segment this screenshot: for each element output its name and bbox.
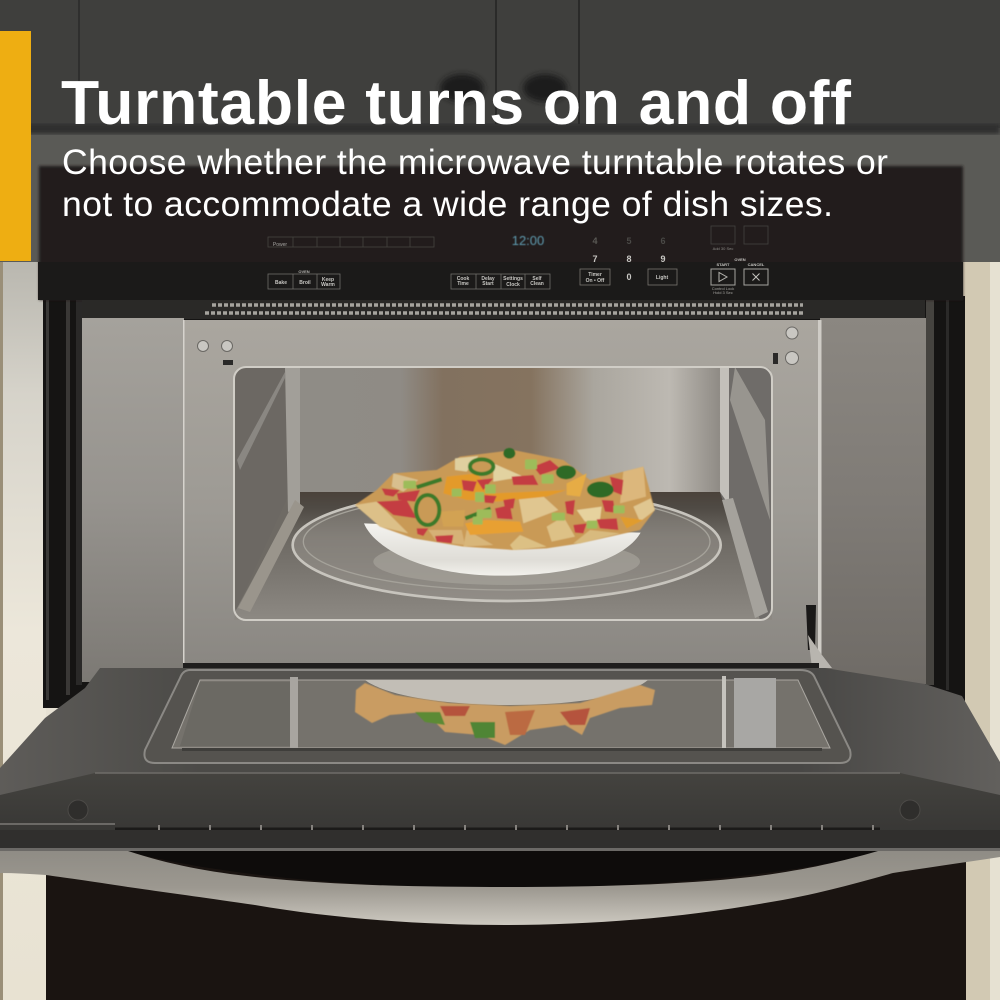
subtitle: not to accommodate a wide range of dish sizes. xyxy=(62,184,833,224)
add 30 sec key xyxy=(711,226,768,251)
power label: Power xyxy=(273,242,287,248)
door notches xyxy=(115,828,880,830)
number keys: 6 xyxy=(660,236,666,246)
oven keys: OVEN xyxy=(298,269,310,274)
steel inner frame xyxy=(183,320,822,665)
timer key xyxy=(580,269,610,285)
cook and settings keys: Clock xyxy=(506,282,520,288)
plate xyxy=(364,523,641,576)
add 30 sec key: Add 30 Sec xyxy=(713,246,733,251)
nachos xyxy=(355,448,655,550)
cook and settings keys: Time xyxy=(457,281,469,287)
number keys xyxy=(592,236,666,282)
cook and settings keys: Cook xyxy=(457,276,469,282)
open oven door top surface xyxy=(0,663,1000,832)
start and cancel keys: OVEN xyxy=(734,257,746,262)
lower oven door xyxy=(46,851,966,1000)
header overlay and text xyxy=(0,31,888,261)
number keys: 7 xyxy=(592,254,598,264)
cook and settings keys: Clean xyxy=(530,281,544,287)
tomato pieces xyxy=(377,460,623,543)
cook and settings keys xyxy=(451,274,550,289)
title: Turntable turns on and off xyxy=(61,68,851,138)
number keys: 9 xyxy=(660,254,666,264)
oven keys: Bake xyxy=(275,280,287,286)
number keys: 8 xyxy=(626,254,632,264)
oven keys xyxy=(268,269,340,289)
stainless door handle xyxy=(0,851,1000,925)
start and cancel keys: Hold 3 Sec xyxy=(713,290,733,295)
yellow accent bar xyxy=(0,31,31,261)
cook and settings keys: Settings xyxy=(503,276,523,282)
start and cancel keys: START xyxy=(716,262,730,267)
top row of mode keys xyxy=(268,237,434,247)
door latch xyxy=(806,605,832,668)
dark gap above handle xyxy=(125,851,880,888)
door front panel xyxy=(0,773,1000,851)
timer key: Timer xyxy=(588,272,602,278)
light key xyxy=(648,269,677,285)
reflected plate xyxy=(365,680,648,705)
start and cancel keys: CANCEL xyxy=(748,262,765,267)
green onion xyxy=(403,459,625,529)
start and cancel keys xyxy=(711,257,768,295)
back wall xyxy=(300,367,720,492)
left steel side panel xyxy=(82,318,184,682)
upper cabinet, darkened header background xyxy=(0,0,1000,262)
subtitle: Choose whether the microwave turntable rotates or xyxy=(62,142,888,182)
right steel side panel xyxy=(820,318,926,684)
cook and settings keys: Delay xyxy=(481,276,495,282)
floor xyxy=(234,492,772,620)
number keys: 0 xyxy=(626,272,632,282)
door window xyxy=(144,670,851,763)
oven keys: Warm xyxy=(321,282,335,288)
reflected nachos xyxy=(355,683,655,745)
light key: Light xyxy=(656,275,668,281)
melted cheese xyxy=(443,473,567,502)
control panel xyxy=(38,166,963,300)
glass turntable and plate of nachos xyxy=(293,448,721,601)
right rivet xyxy=(900,800,920,820)
oven body frame xyxy=(43,296,965,708)
number keys: 4 xyxy=(592,236,598,246)
left wall xyxy=(236,367,290,610)
number keys: 5 xyxy=(626,236,632,246)
screws xyxy=(198,327,798,364)
digital clock display: 12:00 xyxy=(512,233,544,248)
jalapeno slices xyxy=(416,459,493,525)
start and cancel keys: Control Lock xyxy=(712,286,734,291)
timer key: On • Off xyxy=(586,278,605,284)
chips base xyxy=(355,450,655,550)
cook and settings keys: Self xyxy=(532,276,542,282)
vent strip xyxy=(82,300,925,319)
subtitle xyxy=(62,142,888,224)
oven keys: Broil xyxy=(299,280,311,286)
oven keys: Keep xyxy=(322,277,334,283)
cook and settings keys: Start xyxy=(482,281,494,287)
right wall xyxy=(720,367,772,620)
left rivet xyxy=(68,800,88,820)
microwave cavity xyxy=(234,367,772,620)
glass turntable xyxy=(293,489,721,601)
